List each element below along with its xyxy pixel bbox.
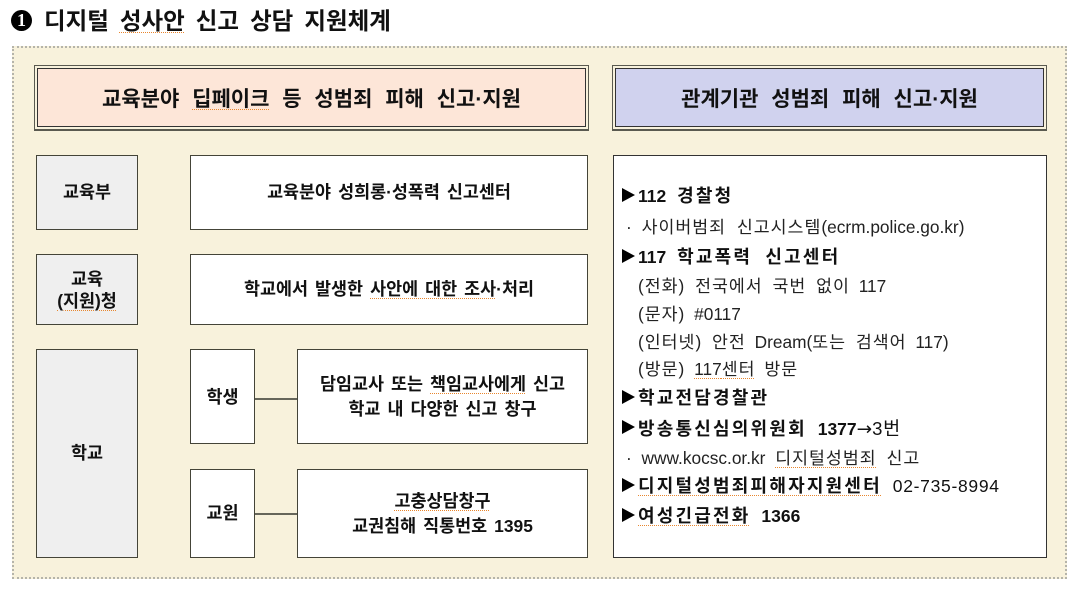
- box: student reporting: 담임교사 또는 책임교사에게 신고: [320, 374, 565, 394]
- box: teacher reporting: [297, 469, 588, 558]
- box: student reporting: [297, 349, 588, 444]
- list item: women hotline: 여성긴급전화 1366: [638, 506, 800, 526]
- icon: triangle KCSC: [622, 420, 635, 434]
- icon: triangle 117: [622, 249, 635, 263]
- box: teachers: [190, 469, 255, 558]
- list item: cyber report: · 사이버범죄 신고시스템(ecrm.police.go.kr): [626, 217, 964, 237]
- heading: education sector: 교육분야 딥페이크 등 성범죄 피해 신고·지원: [102, 88, 521, 110]
- list item: 112: 112 경찰청: [638, 186, 733, 206]
- box: education office: [36, 254, 138, 325]
- icon: triangle 112: [622, 188, 635, 202]
- icon: triangle women hotline: [622, 508, 635, 522]
- heading: related agencies: [612, 65, 1047, 131]
- title: 디지털 성사안 신고 상담 지원체계: [44, 8, 391, 34]
- list item: school police: 학교전담경찰관: [638, 388, 769, 408]
- icon: numbered bullet: 1: [17, 10, 26, 30]
- list item: victim support center: 디지털성범죄피해자지원센터 02-735-8994: [638, 476, 1000, 496]
- box: education office: (지원)청: [57, 290, 117, 310]
- box: ministry: [36, 155, 138, 230]
- heading: related agencies: 관계기관 성범죄 피해 신고·지원: [681, 88, 978, 110]
- connector: teachers: [255, 513, 297, 515]
- box: ministry report center: [190, 155, 588, 230]
- box: education office: 교육: [71, 268, 103, 288]
- panel: agency list: [613, 155, 1047, 558]
- icon: numbered bullet: [11, 10, 32, 31]
- list item: visit: (방문) 117센터 방문: [638, 359, 798, 379]
- box: students: 학생: [206, 387, 238, 407]
- box: ministry: 교육부: [63, 182, 111, 202]
- box: ministry report center: 교육분야 성희롱·성폭력 신고센터: [267, 182, 511, 202]
- box: school: [36, 349, 138, 558]
- list item: text message: (문자) #0117: [638, 304, 741, 324]
- icon: triangle school police: [622, 390, 635, 404]
- heading: education sector: [34, 65, 589, 131]
- box: teacher reporting: 고충상담창구: [394, 490, 490, 510]
- box: teacher reporting: 교권침해 직통번호 1395: [352, 516, 533, 536]
- box: students: [190, 349, 255, 444]
- icon: triangle victim support: [622, 478, 635, 492]
- box: school investigation: [190, 254, 588, 325]
- box: student reporting: 학교 내 다양한 신고 창구: [348, 398, 537, 418]
- box: school: 학교: [71, 443, 103, 463]
- box: school investigation: 학교에서 발생한 사안에 대한 조사·처리: [244, 279, 534, 299]
- connector: students: [255, 398, 297, 400]
- list item: 117: 117 학교폭력 신고센터: [638, 247, 840, 267]
- box: teachers: 교원: [206, 503, 238, 523]
- list item: KCSC: 방송통신심의위원회 1377→3번: [638, 418, 901, 440]
- list item: phone: (전화) 전국에서 국번 없이 117: [638, 276, 886, 296]
- list item: internet: (인터넷) 안전 Dream(또는 검색어 117): [638, 332, 949, 352]
- list item: KCSC website: · www.kocsc.or.kr 디지털성범죄 신고: [626, 448, 920, 468]
